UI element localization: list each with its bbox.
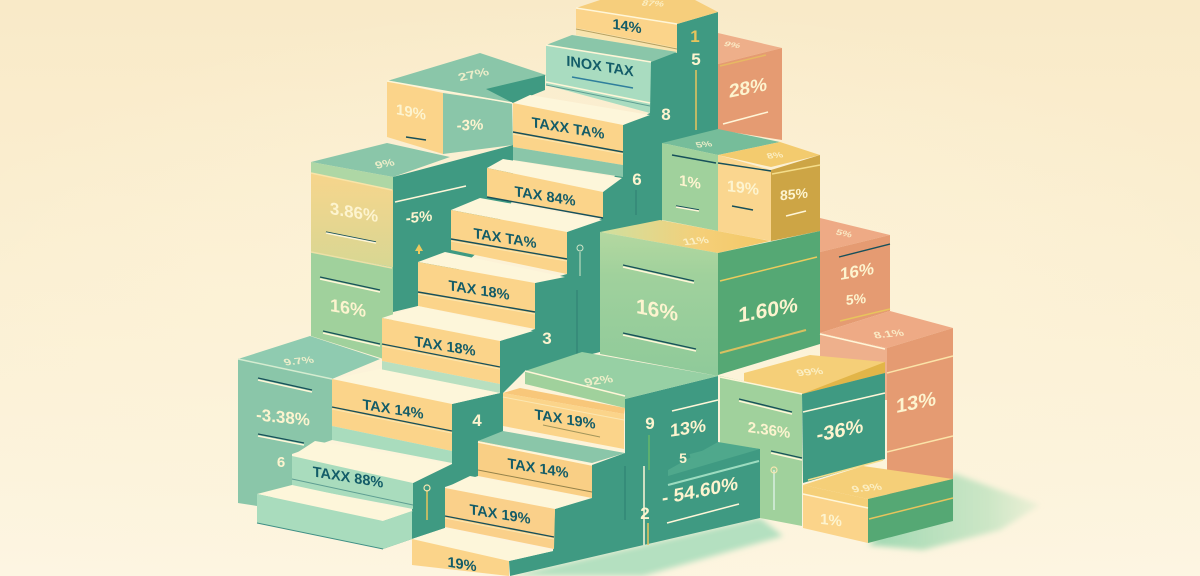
label: 5%: 5% (846, 290, 867, 308)
label: TAX 14%: TAX 14% (363, 397, 423, 423)
step: TAX 84% (487, 159, 622, 218)
step: TAX 14% (332, 369, 500, 463)
label: 28%: 28% (729, 74, 767, 103)
block: yellow/gold cube 19% 85%: 8% (765, 151, 785, 161)
label: 1.60%: 1.60% (738, 294, 798, 327)
step: bottom mint (257, 485, 413, 549)
step: 19% bottom (412, 528, 553, 576)
label: 1%: 1% (679, 172, 701, 193)
block: -3.38% mint (238, 336, 380, 506)
main staircase silhouette (383, 12, 718, 549)
block: orange 13%: 8.1% (872, 328, 906, 341)
label: TAX 18%: TAX 18% (415, 334, 475, 360)
label: 16%: 16% (636, 295, 678, 326)
digit 5: 5 (679, 450, 687, 466)
garbled top label: 9% (722, 40, 743, 50)
block: green 2.36% / teal -36% (720, 355, 885, 526)
block: orange 16% 5% (820, 218, 890, 333)
label: -5%: -5% (406, 208, 432, 227)
floor shadow: bottom (510, 518, 783, 576)
label: 16%: 16% (330, 295, 366, 321)
block: 3.86% and 16% column (311, 143, 513, 362)
label: 54.60%: - 54.60% (662, 474, 738, 510)
icon: arrow up (415, 244, 423, 254)
label: 1%: 1% (820, 511, 842, 530)
label: 13%: 13% (896, 388, 936, 418)
label: -3%: -3% (457, 116, 483, 135)
label: TAX 18%: TAX 18% (449, 278, 509, 304)
label: 16%: 16% (840, 259, 874, 284)
block: yellow/gold cube 19% 85% (718, 142, 820, 241)
step: TAX TA% (451, 198, 602, 274)
digit 5: 5 (691, 50, 701, 69)
label: 19%: 19% (396, 101, 427, 124)
label: INOX TAX: INOX TAX (566, 54, 634, 80)
digit 9: 9 (645, 414, 655, 433)
label: TAXX TA%: TAXX TA% (532, 115, 604, 143)
step: TAX 19% (503, 388, 625, 449)
block: green cube 1% (662, 129, 780, 231)
label: 13%: 13% (670, 415, 706, 441)
step: TAX 18% upper (418, 252, 565, 329)
lower staircase silhouette (509, 376, 760, 576)
block: green cube 1%: 5% (694, 140, 714, 150)
step: INOX TAX (546, 35, 677, 113)
block: orange 13% (820, 311, 953, 500)
stair numbers (424, 27, 701, 520)
floor shadow: right (868, 473, 1040, 550)
label: -3.38%: -3.38% (256, 405, 310, 430)
block: top-left 19% (387, 53, 546, 154)
label: 19%: 19% (447, 555, 477, 575)
label: TAX 19%: TAX 19% (470, 502, 530, 528)
label: 14%: 14% (612, 17, 642, 37)
label: 3.86%: 3.86% (330, 199, 378, 226)
digit 4: 4 (472, 411, 482, 430)
step: green top 92% (525, 352, 718, 408)
block: bottom yellow/green box (803, 466, 953, 543)
block: orange 28% (718, 33, 782, 140)
step: TAXX TA% (513, 95, 650, 177)
digit 8: 8 (661, 105, 671, 124)
digit 3: 3 (542, 329, 552, 348)
step: TAXX 88% (292, 441, 450, 509)
top label: 9.7% (282, 355, 316, 368)
label: TAX 14%: TAX 14% (508, 456, 568, 482)
label: -36%: -36% (817, 415, 863, 447)
label: TAXX 88%: TAXX 88% (313, 464, 383, 492)
block: -54.60% panel (625, 400, 760, 545)
block: big green 16% / 1.60% (600, 220, 820, 376)
step: TAX 14% lower (478, 431, 625, 498)
digit 1: 1 (690, 27, 700, 46)
digit 2: 2 (640, 504, 650, 523)
step: 14% (576, 0, 718, 53)
label: 85%: 85% (780, 185, 809, 203)
label: TAX 84%: TAX 84% (515, 184, 575, 210)
top label: 9% (373, 156, 397, 171)
digit 6: 6 (632, 170, 642, 189)
step: TAX 19% lowest (445, 476, 590, 549)
step: green top 92%: 92% (582, 372, 616, 389)
block: green 2.36% / teal -36%: 99% (795, 367, 825, 379)
block: bottom yellow/green box: 9.9% (850, 482, 884, 495)
label: TAX 19%: TAX 19% (535, 407, 595, 433)
top label: 27% (456, 65, 491, 84)
digit 6: 6 (277, 454, 285, 471)
block: orange 16% 5%: 5% (834, 228, 854, 240)
label: 19%: 19% (727, 177, 759, 199)
block: big green 16% / 1.60%: 11% (681, 236, 711, 248)
step: TAX 18% lower (382, 306, 533, 393)
label: 2.36%: 2.36% (748, 419, 790, 442)
label: TAX TA%: TAX TA% (473, 226, 537, 252)
